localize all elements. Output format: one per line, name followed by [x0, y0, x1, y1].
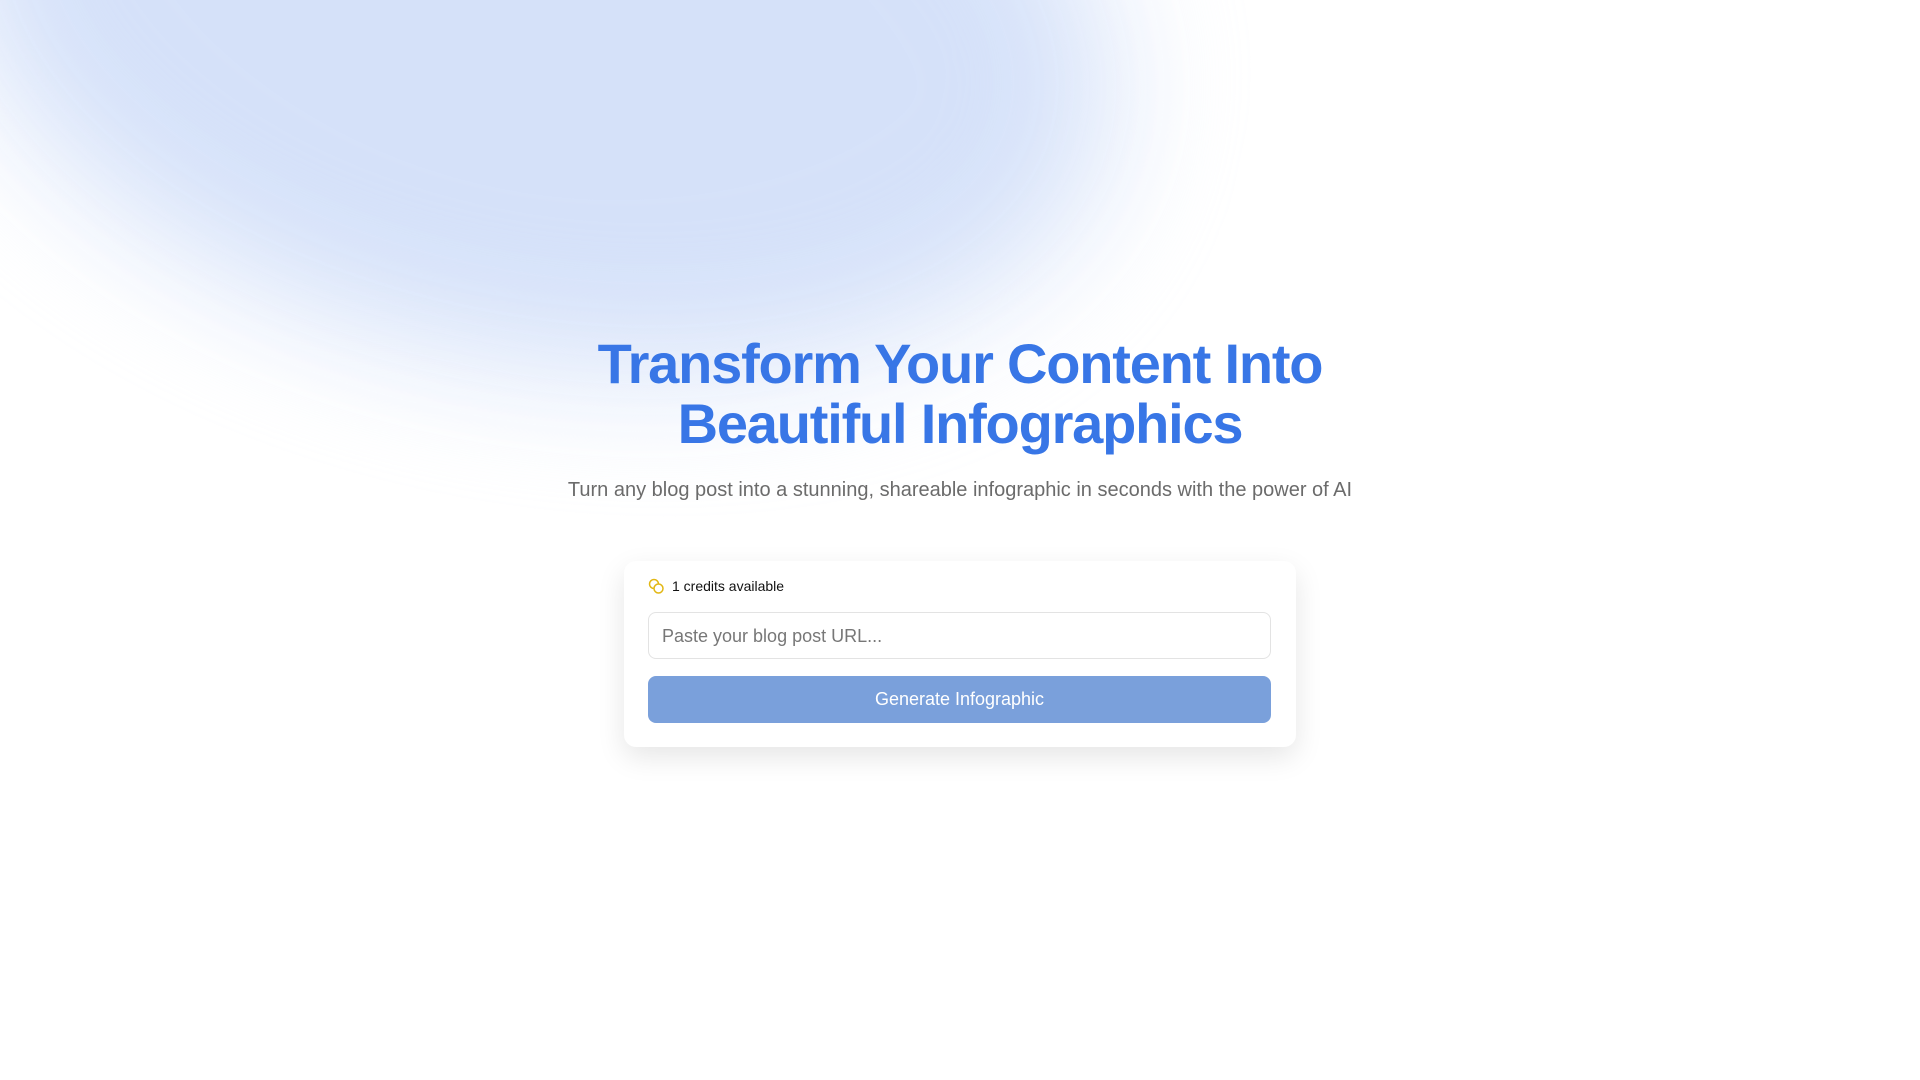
icon: coins	[648, 578, 664, 594]
title: Beautiful Infographics	[678, 392, 1242, 455]
URL input	[648, 612, 1271, 659]
title	[598, 332, 1322, 455]
credits indicator: 1 credits available	[672, 578, 784, 594]
generate button	[648, 676, 1271, 723]
generate button: Generate Infographic	[875, 689, 1044, 709]
URL input: Paste your blog post URL...	[662, 626, 882, 646]
title: Transform Your Content Into	[598, 332, 1322, 395]
panel: input card	[624, 561, 1296, 747]
background blob	[0, 0, 1180, 475]
subtitle: Turn any blog post into a stunning, shareable infographic in seconds with the power of AI	[568, 479, 1352, 501]
